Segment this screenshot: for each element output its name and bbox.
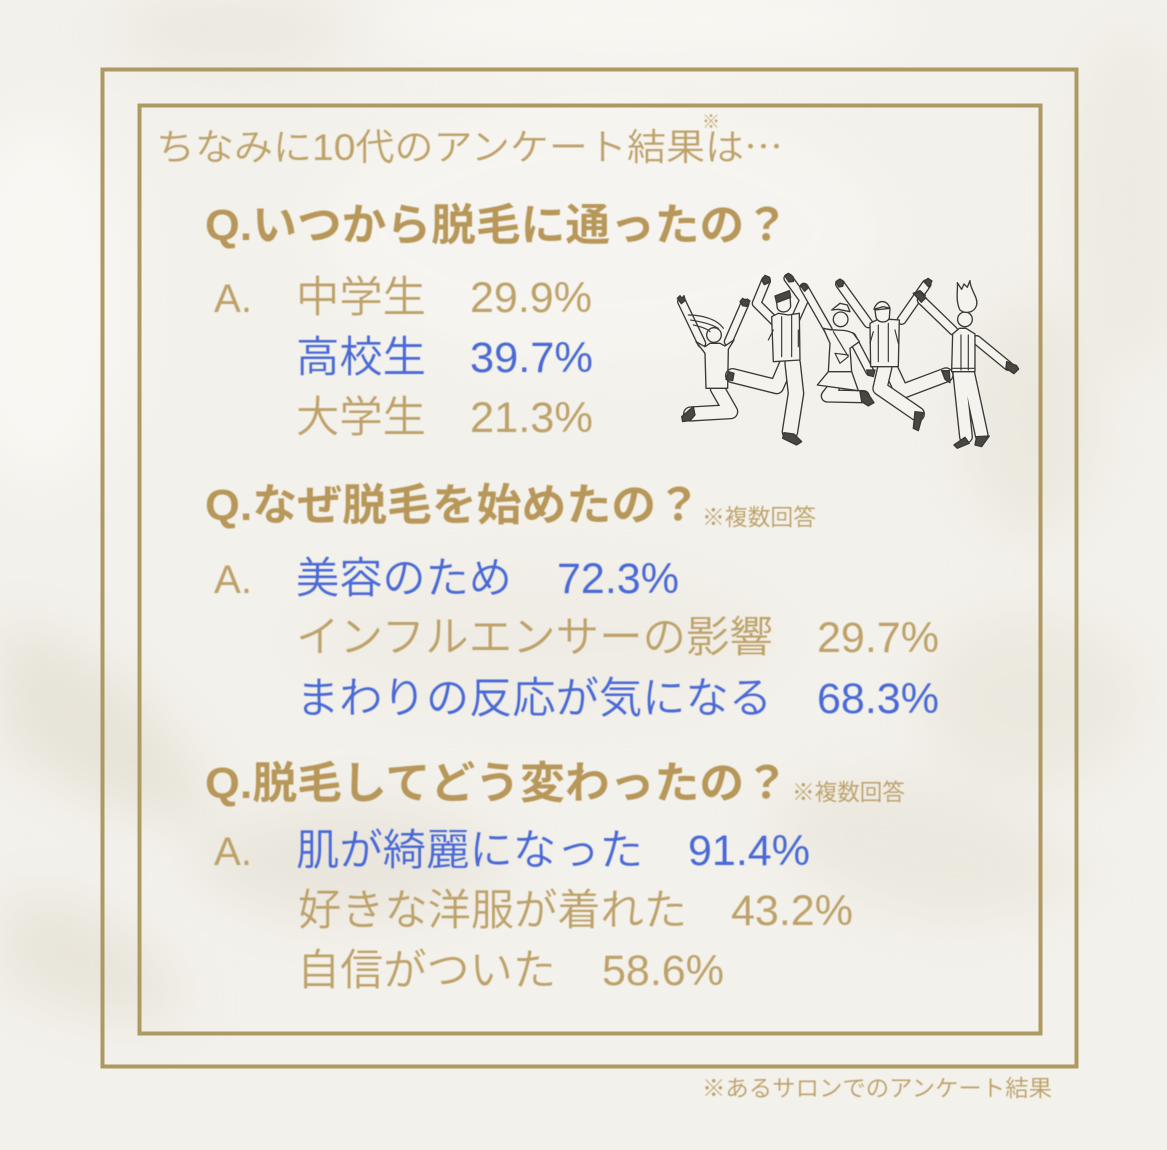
answers 1: 大学生 xyxy=(296,394,426,442)
person 3 xyxy=(801,284,875,406)
answers 2: インフルエンサーの影響 xyxy=(296,614,773,662)
person 2 xyxy=(726,273,804,445)
answers 2: 68.3% xyxy=(817,675,939,723)
question 2 note: ※複数回答 xyxy=(702,504,816,530)
answers 1: A. xyxy=(214,277,252,321)
answers 2: 72.3% xyxy=(557,555,679,603)
answers 3: 自信がついた xyxy=(297,947,556,995)
answers 1 xyxy=(214,274,593,442)
answers 3: A. xyxy=(214,830,252,874)
answers 2: まわりの反応が気になる xyxy=(296,675,772,723)
question 3 note: ※複数回答 xyxy=(792,779,905,805)
question 3 heading: Q.脱毛してどう変わったの？ xyxy=(205,759,789,808)
footnote: ※あるサロンでのアンケート結果 xyxy=(702,1075,1052,1101)
person 4 xyxy=(836,278,950,431)
inner gold frame xyxy=(140,106,1040,1034)
answers 3: 91.4% xyxy=(688,827,810,875)
title: ちなみに10代のアンケート結果は … xyxy=(156,117,783,171)
answers 2 xyxy=(214,555,939,723)
answers 3: 58.6% xyxy=(602,947,724,995)
answers 2: A. xyxy=(214,558,252,602)
person 5 xyxy=(913,281,1019,448)
answers 3: 肌が綺麗になった xyxy=(296,827,643,875)
answers 1: 29.9% xyxy=(470,274,592,322)
answers 1: 高校生 xyxy=(296,334,426,382)
answers 3 xyxy=(214,827,853,995)
answers 1: 39.7% xyxy=(470,334,593,382)
question 2 heading: Q.なぜ脱毛を始めたの？ xyxy=(205,481,701,530)
answers 2: 29.7% xyxy=(817,614,939,662)
answers 1: 21.3% xyxy=(470,394,593,442)
question 1 heading: Q.いつから脱毛に通ったの？ xyxy=(205,201,789,250)
title footnote mark: ※ xyxy=(702,112,720,132)
person 1 xyxy=(677,296,750,422)
answers 3: 43.2% xyxy=(731,887,853,935)
answers 3: 好きな洋服が着れた xyxy=(298,887,687,935)
outer gold frame xyxy=(102,70,1076,1066)
illustration: five people jumping xyxy=(677,273,1019,448)
answers 1: 中学生 xyxy=(296,274,426,322)
answers 2: 美容のため xyxy=(296,555,512,603)
all text block xyxy=(156,112,1052,1101)
